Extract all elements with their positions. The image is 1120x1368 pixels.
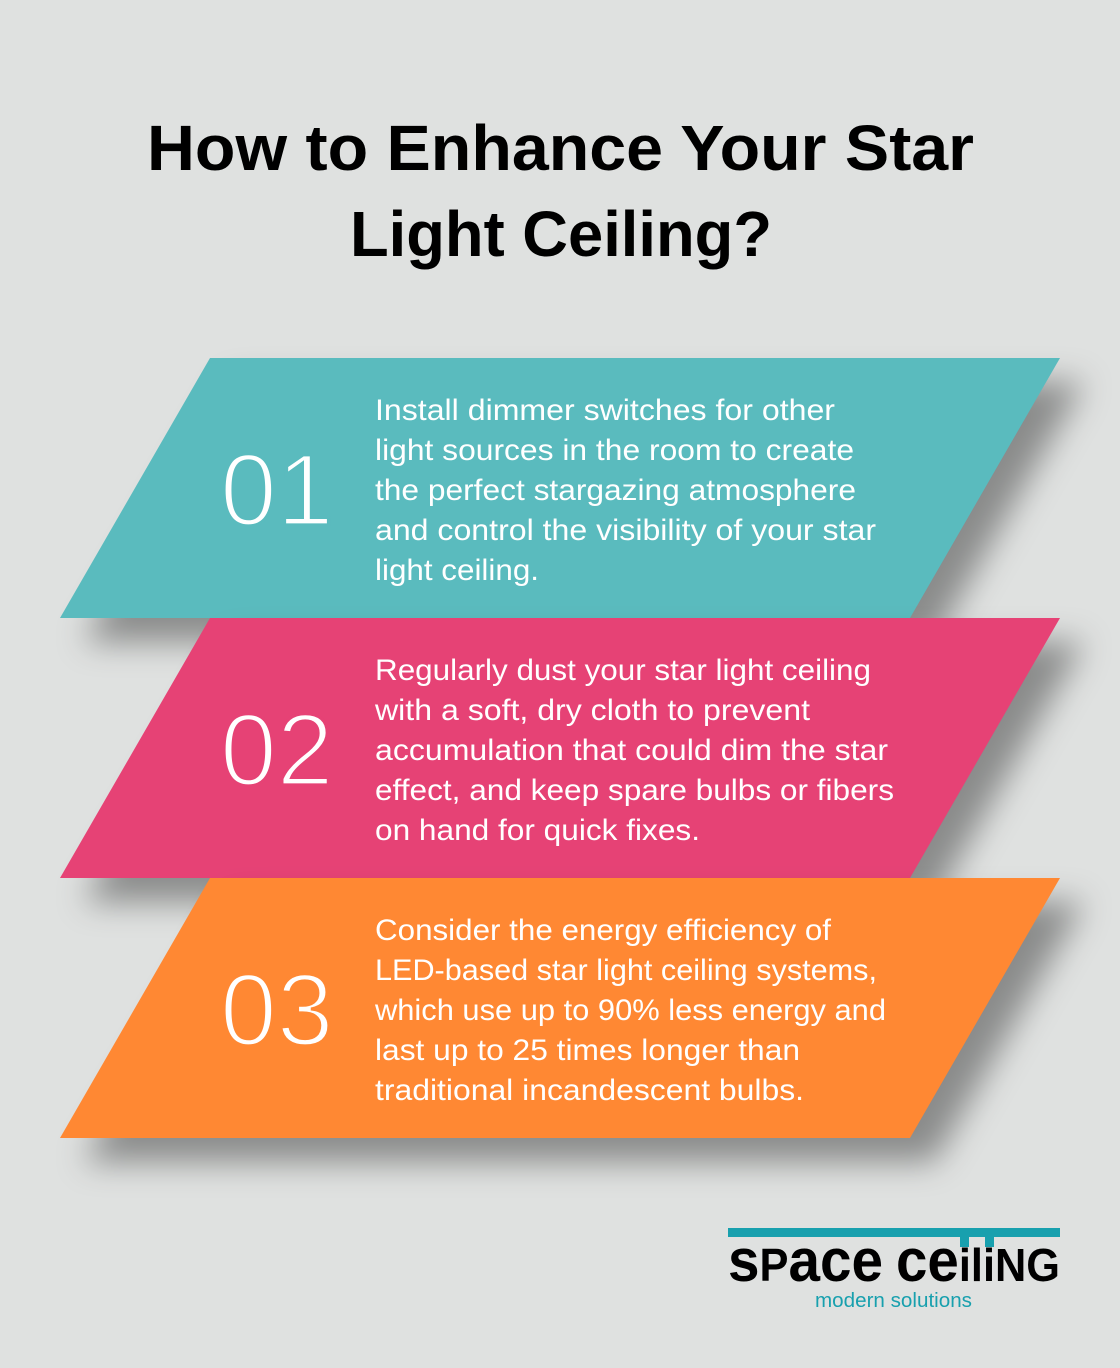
title: How to Enhance Your Star xyxy=(147,112,974,184)
panel: step 03 xyxy=(60,878,1084,1162)
text: step 02: effect, and keep spare bulbs or fibers xyxy=(375,774,894,807)
text: step 01: light ceiling. xyxy=(375,554,539,587)
text: step 02: Regularly dust your star light ceiling xyxy=(375,654,871,687)
title xyxy=(147,112,974,270)
number 03: 03 xyxy=(220,953,333,1067)
text: step 01: and control the visibility of your star xyxy=(375,514,876,547)
panel: step 01 xyxy=(60,358,1084,642)
text: step 01: the perfect stargazing atmosphere xyxy=(375,474,856,507)
text: step 03: LED-based star light ceiling systems, xyxy=(375,954,877,987)
text: step 01 xyxy=(375,394,876,587)
text: step 03: Consider the energy efficiency of xyxy=(375,914,832,947)
text: step 01: light sources in the room to create xyxy=(375,434,854,467)
title: Light Ceiling? xyxy=(350,198,772,270)
logo: Space Ceiling: modern solutions xyxy=(815,1290,972,1312)
logo: Space Ceiling: sPace xyxy=(728,1227,883,1294)
text: step 03: last up to 25 times longer than xyxy=(375,1034,800,1067)
logo: Space Ceiling: ceiliNG xyxy=(896,1227,1060,1294)
number 01: 01 xyxy=(220,433,333,547)
panel: step 02 xyxy=(60,618,1084,902)
number 02: 02 xyxy=(220,693,333,807)
text: step 02: on hand for quick fixes. xyxy=(375,814,700,847)
text: step 02 xyxy=(374,654,894,847)
text: step 03 xyxy=(374,914,886,1107)
text: step 02: with a soft, dry cloth to prevent xyxy=(374,694,811,727)
logo: Space Ceiling xyxy=(728,1227,1060,1312)
text: step 01: Install dimmer switches for other xyxy=(375,394,835,427)
text: step 02: accumulation that could dim the star xyxy=(375,734,888,767)
text: step 03: which use up to 90% less energy and xyxy=(374,994,886,1027)
text: step 03: traditional incandescent bulbs. xyxy=(375,1074,804,1107)
